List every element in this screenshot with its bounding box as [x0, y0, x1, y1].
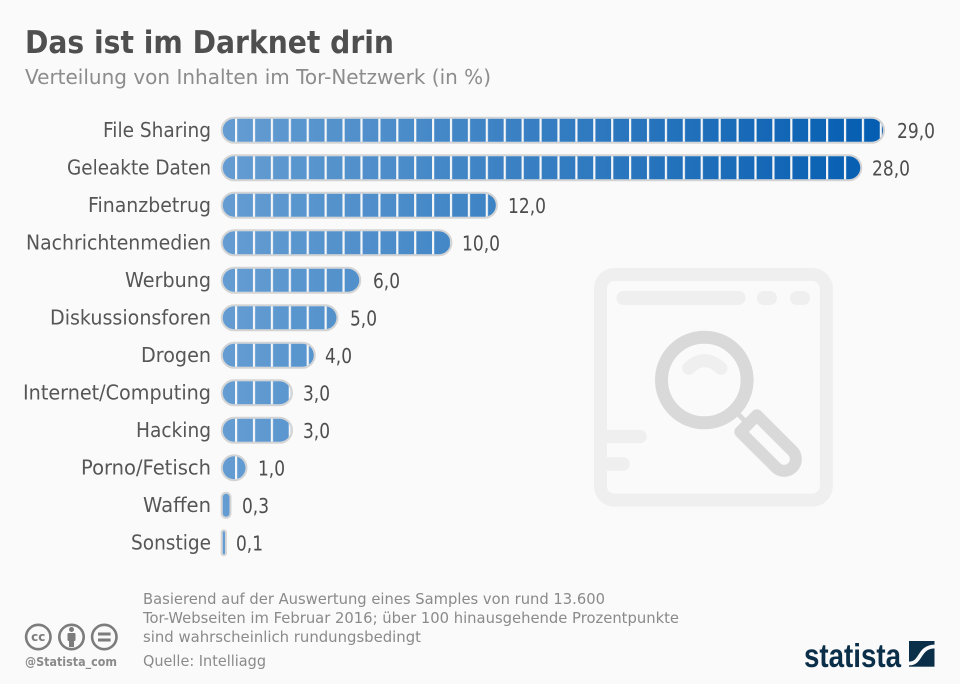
note text: Basierend auf der Auswertung eines Samples von rund 13.600	[143, 590, 605, 608]
row: Porno/Fetisch 1,0: 1,0	[258, 456, 285, 480]
row: Internet/Computing 3,0: 3,0	[303, 382, 330, 406]
logo: statista: statista	[804, 637, 902, 674]
row: Diskussionsforen 5,0	[50, 305, 377, 330]
row: Nachrichtenmedien 10,0: Nachrichtenmedien	[26, 230, 211, 254]
row: Finanzbetrug 12,0: 12,0	[508, 194, 546, 218]
row: Porno/Fetisch 1,0: Porno/Fetisch	[81, 456, 211, 480]
row: Drogen 4,0: Drogen	[141, 343, 211, 367]
row: Werbung 6,0: 6,0	[373, 269, 400, 293]
note text	[142, 590, 679, 646]
note text: Tor-Webseiten im Februar 2016; über 100 hinausgehende Prozentpunkte	[142, 609, 679, 627]
row: Drogen 4,0	[141, 343, 352, 368]
title: Das ist im Darknet drin	[25, 25, 394, 61]
row: Hacking 3,0: 3,0	[303, 419, 330, 443]
social handle: @Statista_com	[25, 655, 117, 670]
row: Waffen 0,3: 0,3	[242, 494, 269, 518]
icon: creative commons licence: cc	[31, 630, 45, 644]
row: File Sharing 29,0: File Sharing	[103, 118, 211, 142]
icon: creative commons licence	[26, 625, 117, 649]
row: Hacking 3,0: Hacking	[136, 418, 211, 442]
row: Waffen 0,3	[143, 493, 269, 518]
row: File Sharing 29,0	[103, 118, 935, 143]
row: Nachrichtenmedien 10,0	[26, 230, 500, 256]
background icon: browser window with magnifier	[600, 274, 826, 500]
subtitle: Verteilung von Inhalten im Tor-Netzwerk (in %)	[25, 65, 491, 89]
row: Sonstige 0,1	[131, 530, 263, 556]
row: File Sharing 29,0: 29,0	[897, 119, 935, 143]
row: Sonstige 0,1: Sonstige	[131, 530, 211, 554]
row: Internet/Computing 3,0: Internet/Computing	[23, 380, 211, 404]
row: Porno/Fetisch 1,0	[81, 455, 285, 480]
row: Nachrichtenmedien 10,0: 10,0	[462, 232, 500, 256]
note text: sind wahrscheinlich rundungsbedingt	[143, 628, 421, 646]
row: Geleakte Daten 28,0	[67, 155, 910, 180]
row: Finanzbetrug 12,0	[88, 193, 546, 218]
source: Quelle: Intelliagg	[143, 652, 266, 670]
row: Waffen 0,3: Waffen	[143, 493, 211, 517]
row: Drogen 4,0: 4,0	[325, 344, 352, 368]
row: Werbung 6,0: Werbung	[125, 268, 211, 292]
row: Geleakte Daten 28,0: 28,0	[872, 156, 910, 180]
row: Diskussionsforen 5,0: 5,0	[350, 306, 377, 330]
bar chart	[23, 118, 935, 556]
row: Hacking 3,0	[136, 418, 330, 443]
row: Sonstige 0,1: 0,1	[236, 532, 263, 556]
row: Werbung 6,0	[125, 268, 400, 293]
row: Diskussionsforen 5,0: Diskussionsforen	[50, 306, 211, 330]
row: Internet/Computing 3,0	[23, 380, 330, 406]
row: Finanzbetrug 12,0: Finanzbetrug	[88, 193, 211, 217]
row: Geleakte Daten 28,0: Geleakte Daten	[67, 156, 211, 180]
